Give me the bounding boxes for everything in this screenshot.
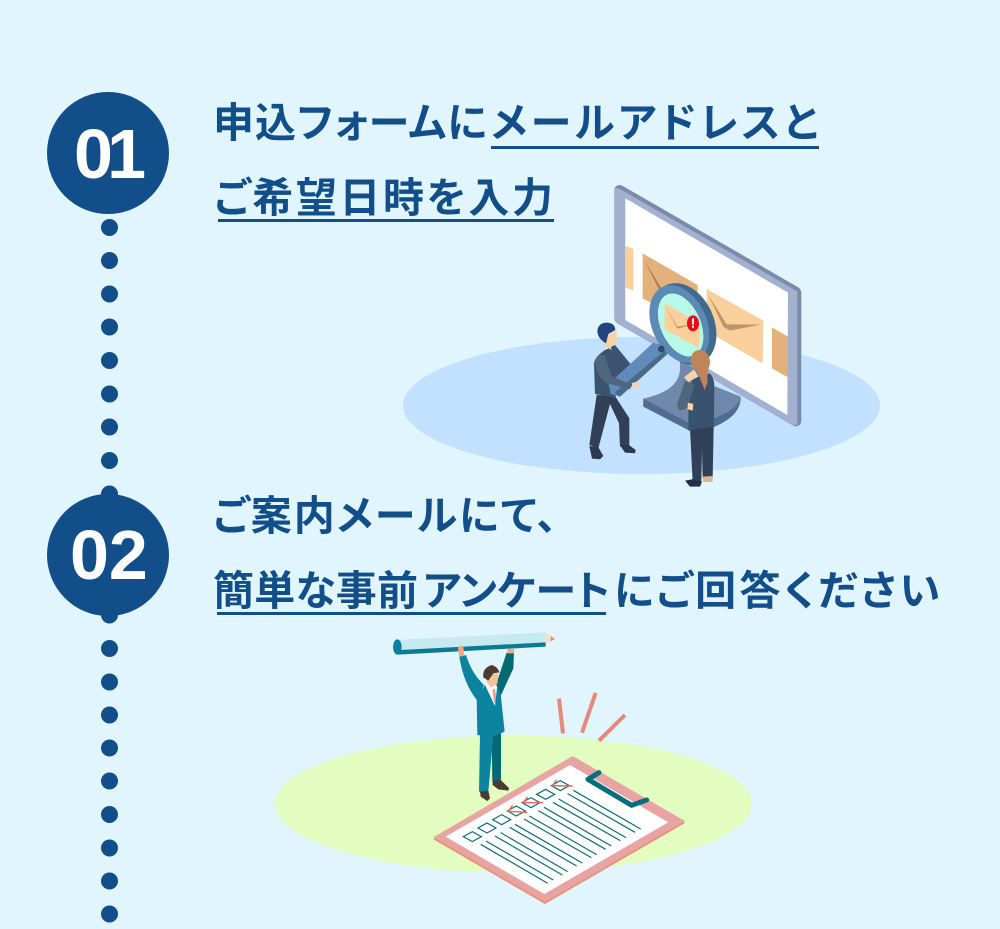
check marks: [508, 780, 573, 812]
clipboard: [433, 756, 685, 904]
heading: step 1: [213, 100, 819, 222]
background ellipse green: [275, 736, 752, 872]
dotted timeline 2: [101, 606, 118, 922]
heading: step 1: 申込フォームに: [213, 100, 487, 146]
heading: step 1: ご希望日時を入力: [214, 175, 553, 221]
step badge 01: 01: [74, 115, 146, 193]
big pencil: [393, 632, 555, 655]
magnifier lens: [638, 273, 729, 375]
step badge 01: [47, 92, 169, 214]
monitor frame: [614, 185, 801, 426]
heading: step 2: [213, 493, 940, 615]
heading: step 1: メールアドレスと: [491, 100, 818, 146]
illustration: monitor with magnifier and two people: [589, 185, 801, 487]
heading: step 2: 簡単な事前: [213, 568, 418, 614]
man in suit: [458, 646, 514, 801]
clipboard clip: [588, 773, 647, 805]
man with magnifier: [589, 323, 667, 459]
monitor screen: [625, 198, 788, 415]
envelopes on screen: [625, 246, 788, 377]
heading: step 2: アンケート: [423, 568, 610, 614]
heading: step 2: にご回答ください: [614, 568, 940, 614]
woman: [677, 350, 714, 487]
background ellipse blue: [403, 337, 880, 474]
accent lines: [559, 693, 625, 741]
magnifier handle: [609, 343, 667, 397]
illustration: man holding pencil and checklist clipboard: [393, 632, 685, 904]
dotted timeline 1: [101, 219, 118, 502]
text lines: [481, 790, 641, 883]
heading: step 2: ご案内メールにて、: [213, 493, 557, 539]
step badge 02: [47, 494, 169, 616]
monitor stand: [643, 357, 741, 431]
step badge 02: 02: [70, 516, 148, 594]
checkboxes: [463, 781, 569, 842]
